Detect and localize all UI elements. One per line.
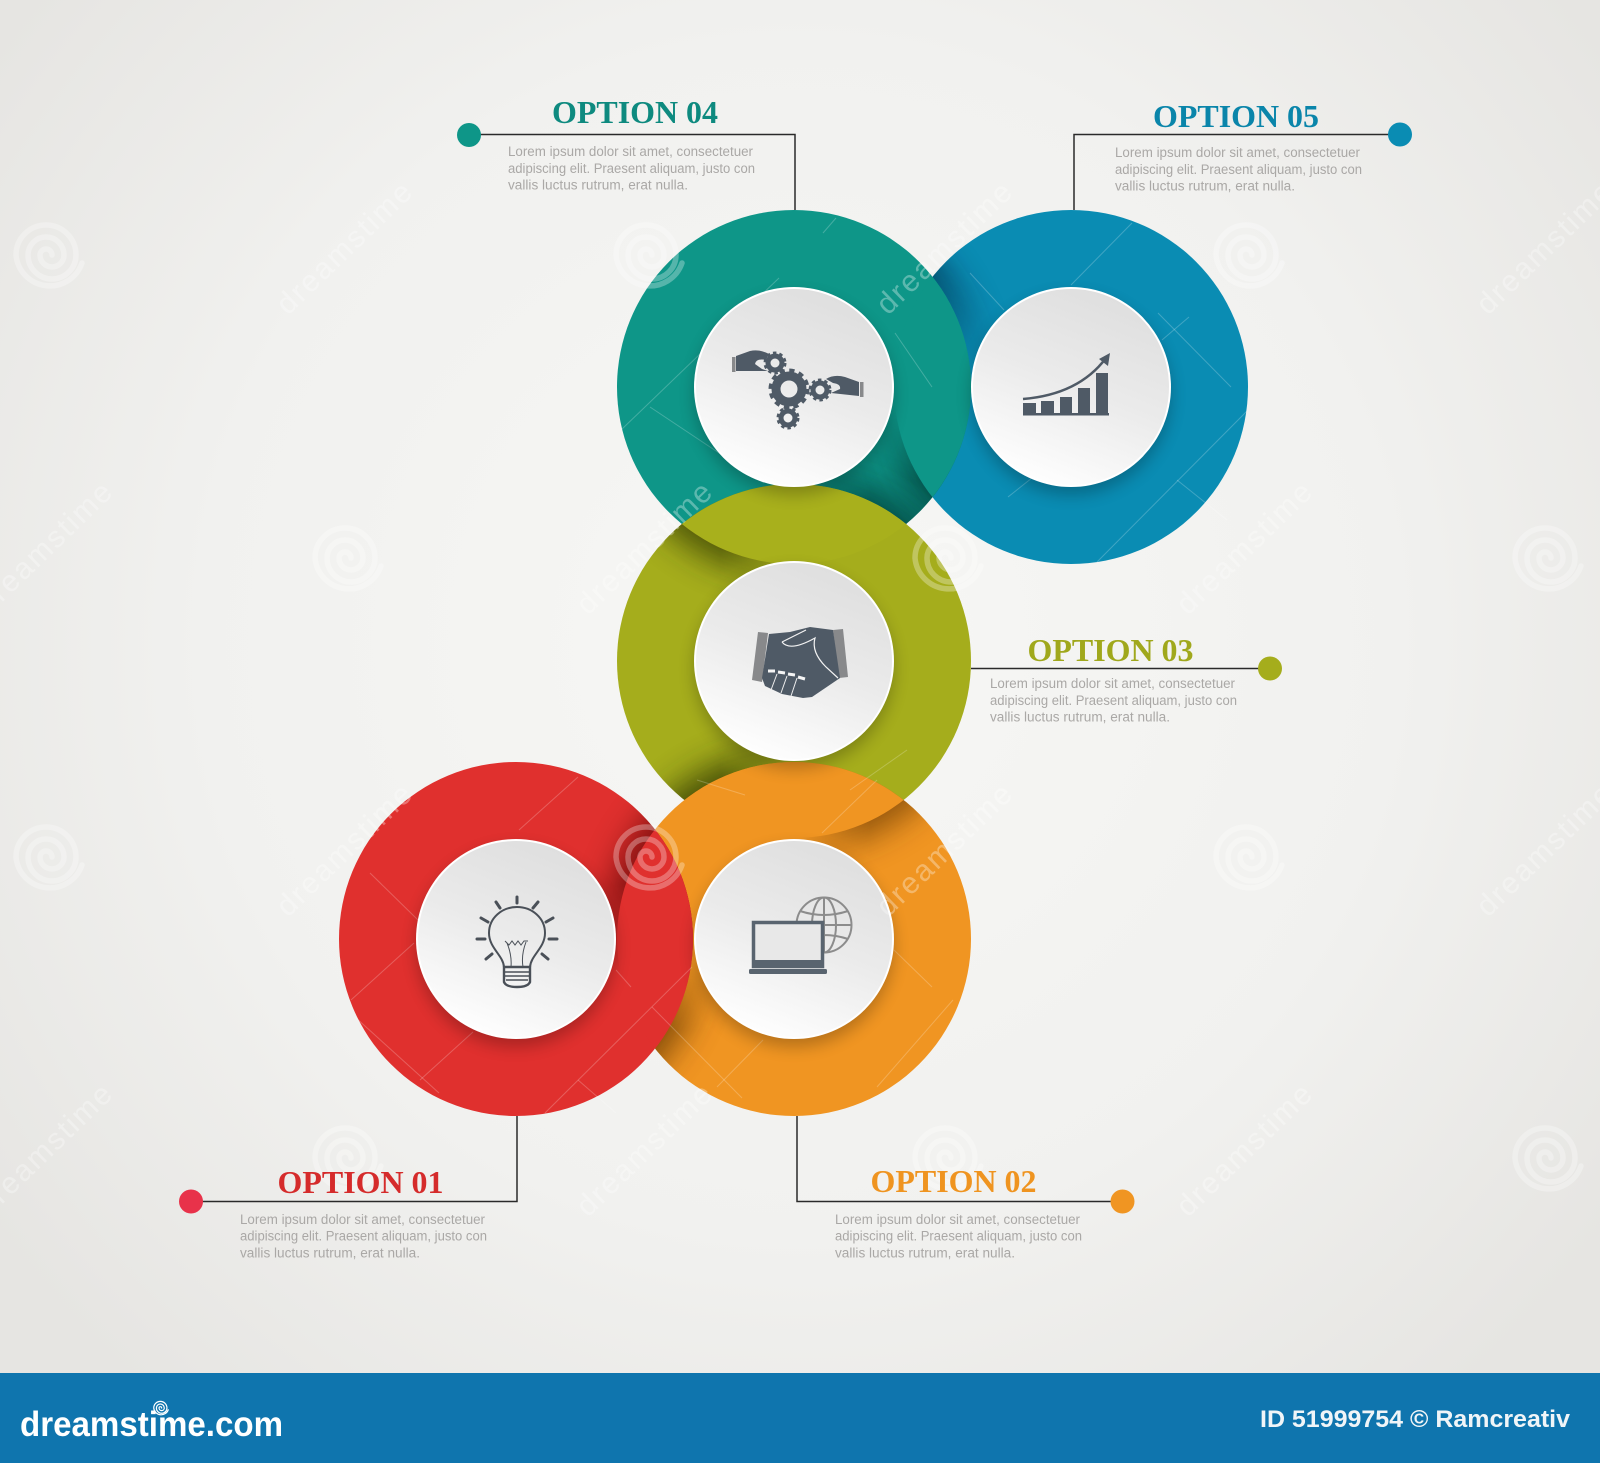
callout: option 01 [179,1116,517,1260]
callout: option 02 [797,1116,1134,1260]
circle: option 01 red ring [339,762,693,1116]
callout: option 04 [457,94,795,210]
callout: option 02: OPTION 02 [870,1163,1036,1199]
callout: option 04: Lorem ipsum dolor sit amet, consectetuer [508,144,753,159]
icon: handshake [752,627,848,698]
callout: option 03: OPTION 03 [1028,632,1194,668]
callout: option 04: OPTION 04 [552,94,718,130]
callout: option 04: vallis luctus rutrum, erat nulla. [508,178,688,192]
callout: option 05 [1074,98,1412,210]
circle: option 04 teal ring [617,210,971,524]
plate: option 01 [416,839,616,1047]
icon: hands holding gears [732,350,864,428]
watermark overlay [0,176,1600,1223]
watermark overlay: dreamstime [570,1078,719,1223]
icon: rising bar chart with arrow [1023,353,1110,416]
callout: option 02: Lorem ipsum dolor sit amet, consectetuer [835,1212,1080,1227]
footer logo text: dreamstime.com [20,1405,283,1444]
plate: option 04 [694,287,894,495]
callout: option 04: adipiscing elit. Praesent aliquam, justo con [508,161,755,176]
callout: option 02: vallis luctus rutrum, erat nulla. [835,1246,1015,1260]
icon: light bulb [477,897,557,987]
thin diagonal highlight lines on rings [351,218,1248,1113]
watermark overlay: dreamstime [1170,476,1319,621]
footer credit: ID 51999754 © Ramcreativ [1260,1406,1571,1433]
plate: option 03 [694,561,894,769]
footer band [0,1373,1600,1463]
callout: option 01: adipiscing elit. Praesent aliquam, justo con [240,1228,487,1244]
footer logo spiral [154,1401,168,1415]
plate: option 05 [971,287,1171,495]
callout: option 05: Lorem ipsum dolor sit amet, consectetuer [1115,145,1360,160]
watermark overlay: dreamstime [270,778,419,923]
circle: option 03 green ring [617,485,971,800]
plate: option 02 [694,839,894,1047]
callout: option 05: adipiscing elit. Praesent aliquam, justo con [1115,162,1362,177]
watermark overlay: dreamstime [270,176,419,321]
icon: laptop and globe [749,898,852,974]
callout: option 03: Lorem ipsum dolor sit amet, consectetuer [990,676,1235,691]
watermark overlay: dreamstime [870,176,1019,321]
callout: option 03: vallis luctus rutrum, erat nulla. [990,710,1170,724]
callout: option 03: adipiscing elit. Praesent aliquam, justo con [990,693,1237,708]
circle: option 05 blue ring [932,210,1248,564]
callout: option 05: vallis luctus rutrum, erat nulla. [1115,178,1295,194]
callout: option 01: Lorem ipsum dolor sit amet, consectetuer [240,1212,485,1227]
watermark overlay: dreamstime [1170,1078,1319,1223]
connected circle diagram [325,196,1262,1130]
callout: option 01: OPTION 01 [278,1164,444,1200]
callout: option 05: OPTION 05 [1153,98,1319,134]
watermark overlay: dreamstime [570,476,719,621]
watermark overlay: dreamstime [870,778,1019,923]
callout: option 03 [971,632,1282,724]
circle: option 02 orange ring [655,762,971,1116]
callout: option 01: vallis luctus rutrum, erat nulla. [240,1246,420,1260]
callout: option 02: adipiscing elit. Praesent aliquam, justo con [835,1228,1082,1244]
